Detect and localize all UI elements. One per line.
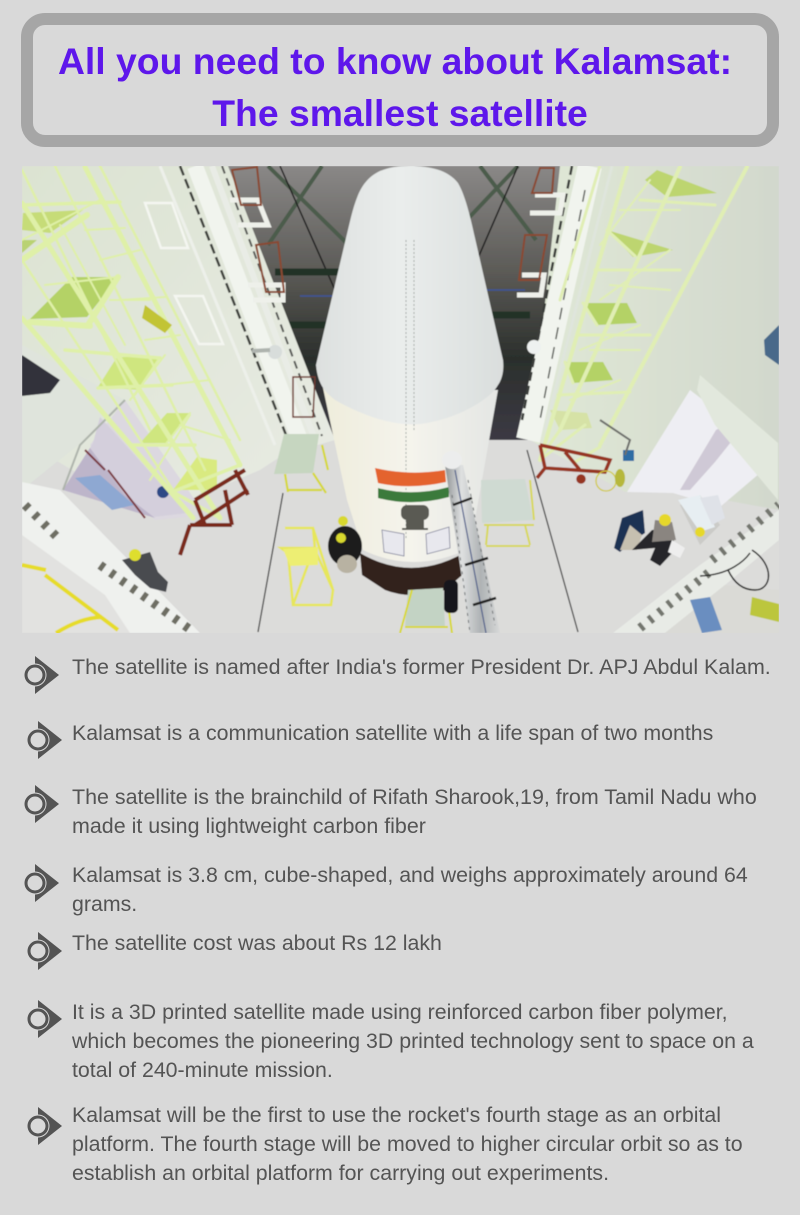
workers at rocket base <box>328 516 362 573</box>
title line 1: All you need to know about Kalamsat: <box>58 40 732 82</box>
title line 2: The smallest satellite <box>212 92 588 134</box>
bullet text <box>72 1000 754 1082</box>
rocket seam <box>406 240 414 540</box>
bullet text: total of 240-minute mission. <box>72 1058 333 1082</box>
rocket fairing <box>316 166 503 424</box>
left bottom stairs <box>22 482 200 633</box>
bullet text <box>72 1103 743 1185</box>
dark ceiling <box>225 166 600 440</box>
icon: target arrow <box>24 785 59 823</box>
bullet text: platform. The fourth stage will be moved to higher circular orbit so as to <box>72 1132 743 1156</box>
flag green band <box>378 487 449 502</box>
banner frame <box>21 13 779 147</box>
bullet text: The satellite cost was about Rs 12 lakh <box>72 931 442 955</box>
bullet 4 <box>24 863 748 916</box>
title banner <box>21 13 779 147</box>
icon: target arrow <box>28 721 62 759</box>
bullet text: Kalamsat will be the first to use the rocket's fourth stage as an orbital <box>72 1103 721 1127</box>
right door and beam <box>627 325 779 507</box>
red trolley left <box>180 470 248 555</box>
bullet text: grams. <box>72 892 137 916</box>
cables <box>700 550 768 590</box>
pale green table <box>274 434 328 493</box>
bullet text <box>72 863 748 916</box>
left lamp <box>252 345 282 359</box>
skirt <box>360 548 472 595</box>
flag saffron band <box>375 468 446 486</box>
right lamp <box>527 340 541 354</box>
person with yellow helmet left <box>122 549 168 592</box>
bullet text: Kalamsat is 3.8 cm, cube-shaped, and weighs approximately around 64 <box>72 863 748 887</box>
rocket <box>316 166 503 595</box>
yellow stool <box>281 528 333 605</box>
desk <box>678 495 725 545</box>
bullet text: The satellite is named after India's former President Dr. APJ Abdul Kalam. <box>72 655 771 679</box>
right bottom stairs <box>613 505 779 633</box>
mission panels <box>382 527 450 556</box>
bullet 2 <box>28 721 713 759</box>
blue cover <box>690 597 722 633</box>
emblem <box>401 505 429 530</box>
icon: target arrow <box>24 864 59 902</box>
bullet text: establish an orbital platform for carrying out experiments. <box>72 1161 609 1185</box>
bullet 6 <box>28 1000 754 1082</box>
bullet text: made it using lightweight carbon fiber <box>72 814 426 838</box>
icon: target arrow <box>28 932 62 970</box>
base platform <box>400 580 458 633</box>
right service truss <box>517 166 612 440</box>
right green tower <box>540 165 747 462</box>
left wall <box>22 166 335 517</box>
red trolley right <box>537 445 610 482</box>
icon: target arrow <box>28 1107 62 1145</box>
floor lines <box>258 450 578 632</box>
bullet text: It is a 3D printed satellite made using reinforced carbon fiber polymer, <box>72 1000 728 1024</box>
bullet 5 <box>28 931 442 970</box>
left wall lower section and door <box>22 345 195 520</box>
bullet text <box>72 785 757 838</box>
hall floor <box>22 400 779 633</box>
photo: rocket in assembly hall <box>22 166 779 633</box>
workers at right <box>614 510 685 566</box>
glass table right <box>481 479 534 546</box>
bullet 1 <box>24 655 771 694</box>
icon: target arrow <box>24 656 59 694</box>
yellow drum <box>750 597 779 622</box>
bullet 7 <box>28 1103 743 1185</box>
bullet text: which becomes the pioneering 3D printed technology sent to space on a <box>72 1029 754 1053</box>
right wall <box>530 166 779 510</box>
left green tower <box>22 166 240 518</box>
icon: target arrow <box>28 1000 62 1038</box>
bullet text: The satellite is the brainchild of Rifath Sharook,19, from Tamil Nadu who <box>72 785 757 809</box>
bullet text: Kalamsat is a communication satellite with a life span of two months <box>72 721 713 745</box>
yellow rail <box>22 565 118 633</box>
bullet 3 <box>24 785 757 838</box>
rocket body <box>323 388 498 562</box>
left service truss <box>145 166 322 445</box>
blue and yellow equipment <box>596 420 634 491</box>
silver pipe <box>442 451 500 633</box>
yellow mounted fixture <box>142 305 172 333</box>
